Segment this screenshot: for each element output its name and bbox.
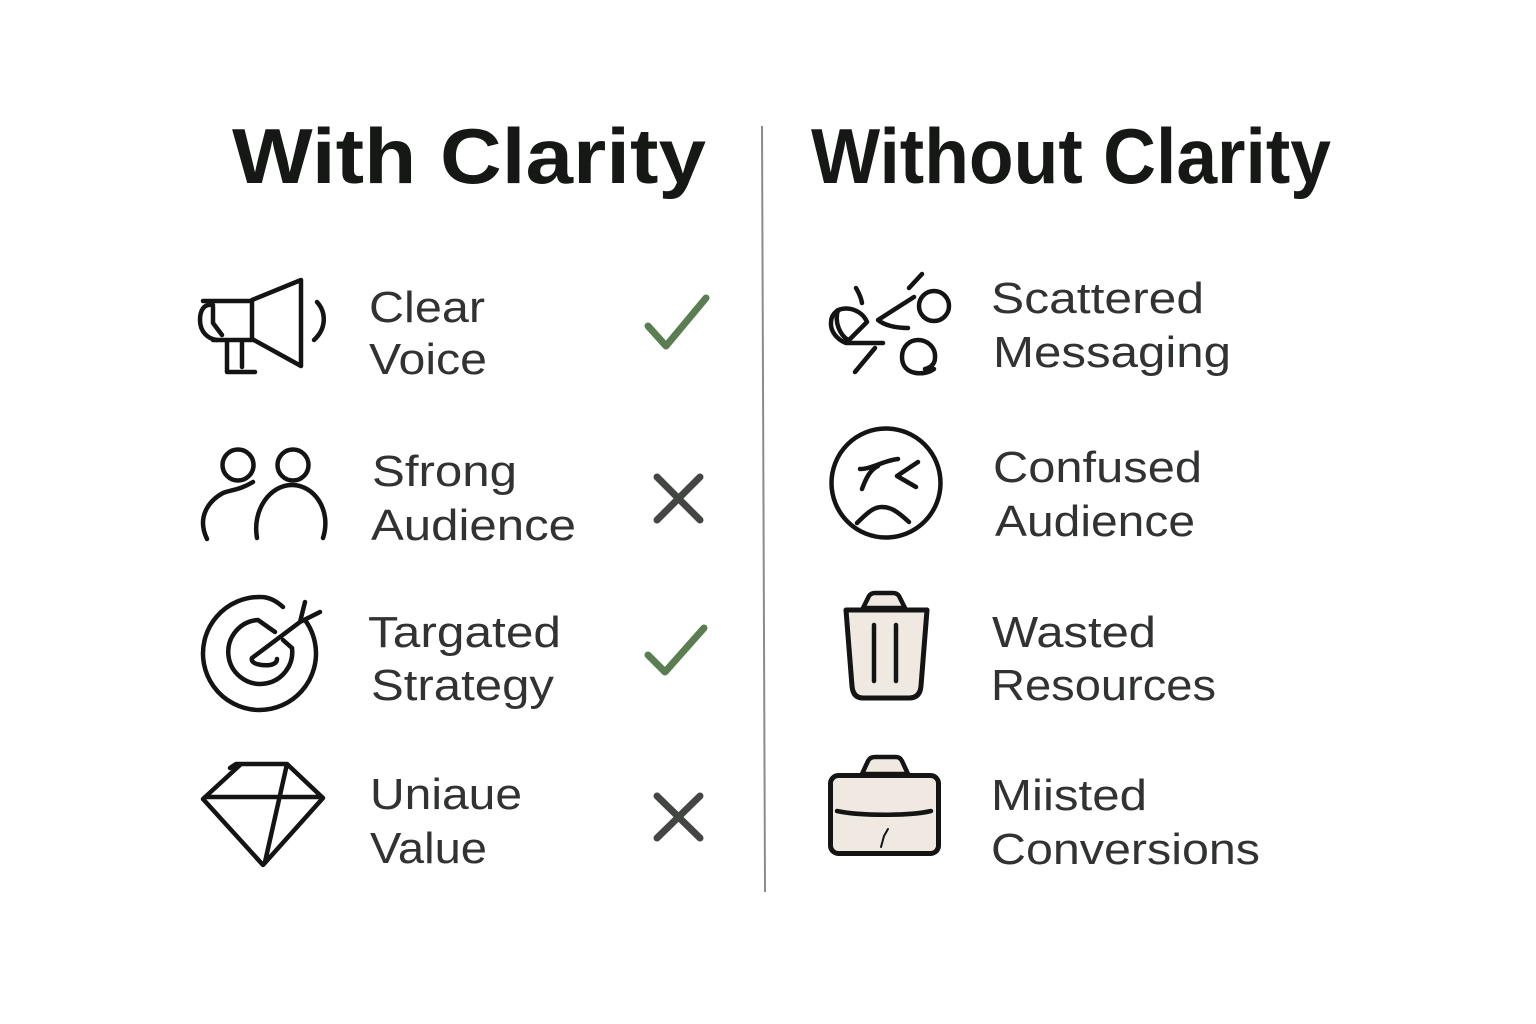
label: targeted strategy: Strategy xyxy=(371,661,554,710)
label: unique value: Value xyxy=(370,824,487,873)
panel: with clarity xyxy=(200,280,706,873)
icon: two people xyxy=(203,450,325,539)
label: wasted resources xyxy=(991,608,1216,710)
label: clear voice xyxy=(369,283,487,384)
center divider xyxy=(762,126,765,892)
icon: diamond xyxy=(203,764,323,865)
heading: With Clarity: With Clarity xyxy=(232,112,706,200)
label: clear voice: Clear xyxy=(369,283,485,332)
heading: Without Clarity: Without Clarity xyxy=(811,112,1331,200)
label: clear voice: Voice xyxy=(369,335,487,384)
check mark xyxy=(648,628,704,672)
label: scattered messaging: Scattered xyxy=(991,274,1204,323)
check mark xyxy=(648,298,706,346)
label: missed conversions: Conversions xyxy=(991,825,1260,874)
panel: without clarity xyxy=(830,274,1260,874)
label: confused audience xyxy=(993,443,1202,546)
label: wasted resources: Wasted xyxy=(992,608,1156,657)
icon: scattered shapes xyxy=(831,274,949,373)
row: unique value xyxy=(203,764,700,873)
x mark xyxy=(657,796,700,838)
label: confused audience: Audience xyxy=(995,497,1195,546)
x mark xyxy=(657,477,700,520)
icon: target with arrow xyxy=(203,597,320,710)
label: missed conversions: Miisted xyxy=(991,771,1147,820)
label: wasted resources: Resources xyxy=(991,661,1216,710)
label: confused audience: Confused xyxy=(993,443,1202,492)
row: scattered messaging xyxy=(831,274,1231,377)
label: unique value xyxy=(370,770,522,873)
row: confused audience xyxy=(832,428,1202,546)
label: targeted strategy xyxy=(368,608,561,710)
label: strong audience: Sfrong xyxy=(372,447,517,496)
label: missed conversions xyxy=(991,771,1260,874)
label: strong audience xyxy=(371,447,576,550)
row: missed conversions xyxy=(830,757,1260,874)
label: unique value: Uniaue xyxy=(370,770,522,819)
icon: trash can xyxy=(846,593,927,698)
row: targeted strategy xyxy=(203,597,704,710)
row: clear voice xyxy=(200,280,706,384)
row: wasted resources xyxy=(846,593,1216,710)
row: strong audience xyxy=(203,447,700,550)
icon: briefcase xyxy=(830,757,938,854)
label: strong audience: Audience xyxy=(371,501,576,550)
label: scattered messaging: Messaging xyxy=(993,328,1231,377)
label: scattered messaging xyxy=(991,274,1231,377)
icon: sad face xyxy=(832,428,940,538)
icon: megaphone xyxy=(200,280,324,372)
label: targeted strategy: Targated xyxy=(368,608,561,657)
